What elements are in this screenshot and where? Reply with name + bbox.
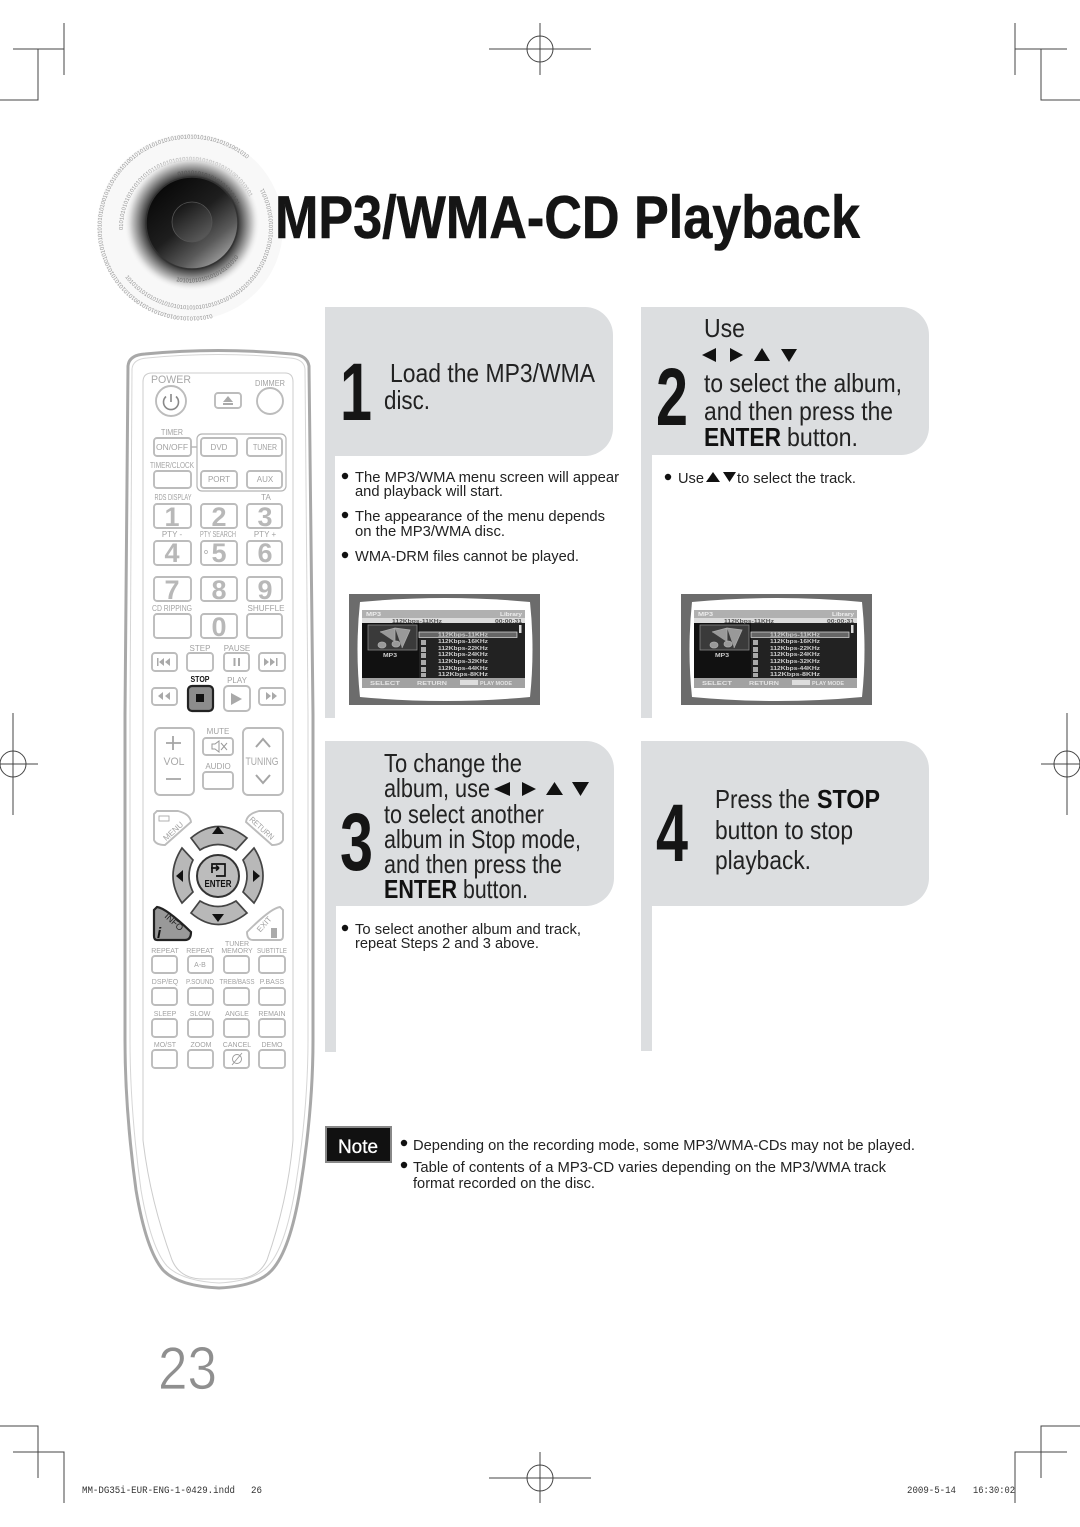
number keys: 3 [257,502,273,532]
navigation pad: ENTER [204,879,232,890]
step 1 bullet notes: and playback will start. [355,484,503,500]
top buttons: DVD [211,443,228,452]
step 1 bullet notes: WMA-DRM files cannot be played. [355,549,579,565]
lower function keys: MEMORY [221,948,253,955]
screen: MP3 menu, step 1: MP3 [383,653,397,659]
lower function keys: MO/ST [154,1042,177,1049]
number keys: 9 [257,575,273,605]
screen: MP3 menu, step 1: MP3 [366,612,381,618]
top buttons: TIMER/CLOCK [150,461,195,470]
panel: step 3: album in Stop mode, [384,824,581,854]
step 1 bullet notes: The appearance of the menu depends [355,509,605,525]
footer: file name: MM-DG35i-EUR-ENG-1-0429.indd [82,1485,235,1497]
step 2 bullet note: Use [678,471,704,487]
number keys: 6 [257,538,273,568]
transport keys: STEP [190,644,210,653]
number keys: 4 [164,538,180,568]
icon: direction arrows [494,782,589,796]
panel: step 2: ENTER [704,422,781,452]
footer: date and time: 16:30:02 [973,1485,1015,1497]
footer: date and time: 2009-5-14 [907,1485,956,1497]
panel: step 3: and then press the [384,849,562,879]
screen: MP3 menu, step 2: SELECT [702,681,733,687]
lower function keys: REPEAT [186,948,214,955]
panel: step 3 [325,741,614,1052]
screen: MP3 menu, step 1: 112Kbps-44KHz [438,666,488,672]
navigation pad: EXIT [255,915,274,934]
panel: step 4: STOP [817,784,880,814]
number keys: 1 [164,502,180,532]
panel: step 1: disc. [384,385,430,415]
panel: step 4 [641,741,929,1051]
number keys: 0 [211,612,227,642]
number keys: SHUFFLE [248,604,284,613]
icon: speaker with binary rings: 10101010101010101010101 [176,256,238,283]
panel: step 3: 3 [340,797,373,888]
lower function keys [151,941,287,1068]
lower function keys: CANCEL [223,1042,251,1049]
top buttons: ON/OFF [156,443,188,452]
screen: MP3 menu, step 2: 112Kbps-11KHz [724,619,774,625]
lower function keys: TUNER [225,941,249,948]
screen: MP3 menu, step 2: 112Kbps-32KHz [770,659,820,665]
note text [401,1138,915,1192]
panel: step 3: To change the [384,748,522,778]
transport keys: STOP [190,675,210,684]
number keys: 8 [211,575,227,605]
note badge [326,1127,391,1162]
screen: MP3 menu, step 1: 112Kbps-22KHz [438,646,488,652]
screen: MP3 menu, step 2: 112Kbps-11KHz [770,632,820,638]
screen: MP3 menu, step 2: Library [832,612,855,618]
page number: 23 [158,1335,217,1402]
number keys: TA [261,493,271,502]
navigation pad: i [157,925,162,942]
panel: step 1: 1 [340,347,372,438]
screen: MP3 menu, step 2: RETURN [749,681,779,687]
lower function keys: DSP/EQ [152,979,179,986]
panel: step 2: Use [704,313,745,343]
screen: MP3 menu, step 1: 112Kbps-16KHz [438,639,488,645]
screen: MP3 menu, step 1: SELECT [370,681,401,687]
icon: speaker with binary rings: 010101010101010101010101 [178,170,240,204]
lower function keys: TREB/BASS [220,979,255,986]
screen: MP3 menu, step 2: 112Kbps-24KHz [770,652,820,658]
navigation pad: INFO [163,911,185,933]
screen: MP3 menu, step 2: PLAY MODE [812,681,844,687]
icon: speaker with binary rings: 0101010101010101010101101010101010101010101010100101010101010101010101010101010101010 [119,156,252,230]
panel: step 2: 2 [656,352,688,443]
screen: MP3 menu, step 1: Library [500,612,523,618]
panel: step 1: Load the MP3/WMA [390,358,596,388]
step 1 bullet notes [342,470,619,565]
transport keys [152,644,285,711]
number keys: RDS DISPLAY [154,493,192,502]
note text: Depending on the recording mode, some MP3/WMA-CDs may not be played. [413,1138,915,1154]
screen: MP3 menu, step 1: 112Kbps-11KHz [392,619,442,625]
number keys: 7 [164,575,180,605]
transport keys: PAUSE [224,644,250,653]
screen: MP3 menu, step 2: 00:00:31 [827,619,854,625]
volume, mute and tuning keys: AUDIO [205,762,231,771]
icon: speaker with binary rings [98,134,273,321]
lower function keys: SUBTITLE [257,948,287,955]
panel: step 2 [641,307,929,718]
top buttons: AUX [257,475,274,484]
screen: MP3 menu, step 2: 112Kbps-22KHz [770,646,820,652]
navigation pad [154,811,283,942]
navigation pad: MENU [161,820,185,843]
step 3 bullet note: repeat Steps 2 and 3 above. [355,936,539,952]
navigation pad: RETURN [248,815,276,842]
footer: file name: 26 [251,1485,262,1497]
screen: MP3 menu, step 1: 00:00:31 [495,619,522,625]
title: MP3/WMA-CD Playback [275,184,861,251]
number keys: 2 [211,502,227,532]
lower function keys: REMAIN [258,1011,286,1018]
lower function keys: ZOOM [190,1042,212,1049]
top buttons: PORT [208,475,230,484]
lower function keys: P.BASS [260,979,285,986]
screen: MP3 menu, step 1: PLAY MODE [480,681,512,687]
volume, mute and tuning keys: TUNING [246,756,278,768]
number keys [152,493,284,642]
volume, mute and tuning keys [155,727,283,795]
top buttons: TIMER [161,428,183,437]
icon: speaker with binary rings: 0101010101001010101010100101010101010100101010101010101010010101010101010010101010101010100101010101010101001010101010101010010101010101010100101010101010101010101011 [98,134,249,321]
top buttons: TUNER [253,443,277,452]
panel: step 3: album, use [384,773,490,803]
panel: step 3: button. [463,874,528,904]
screen: MP3 menu, step 1: RETURN [417,681,447,687]
panel: step 4: button to stop [715,815,853,845]
panel: step 4: 4 [656,788,688,879]
lower function keys: REPEAT [151,948,179,955]
step 1 bullet notes: The MP3/WMA menu screen will appear [355,470,619,486]
screen: MP3 menu, step 2: 112Kbps-16KHz [770,639,820,645]
top buttons: DIMMER [255,379,285,388]
number keys: PTY + [254,530,276,539]
panel: step 2: to select the album, [704,368,902,398]
screen: MP3 menu, step 1: 112Kbps-24KHz [438,652,488,658]
panel: step 2: and then press the [704,396,893,426]
screen: MP3 menu, step 1: 112Kbps-32KHz [438,659,488,665]
panel: step 4: Press the [715,784,810,814]
number keys: 5 [211,538,227,568]
screen: MP3 menu, step 1 [349,594,540,705]
remote control [125,350,313,1288]
panel: step 2: button. [787,422,858,452]
icon: speaker with binary rings: 1010101010101010101010101010101010101010101010101010101010101010101010101011 [125,188,273,310]
screen: MP3 menu, step 2: MP3 [698,612,713,618]
transport keys: PLAY [227,676,248,685]
step 3 bullet note [342,922,581,952]
screen: MP3 menu, step 2: MP3 [715,653,729,659]
lower function keys: A-B [194,962,206,969]
screen: MP3 menu, step 2: 112Kbps-44KHz [770,666,820,672]
volume, mute and tuning keys: VOL [164,756,184,768]
screen: MP3 menu, step 1: 112Kbps-11KHz [438,632,488,638]
number keys: PTY - [162,530,182,539]
lower function keys: SLEEP [154,1011,177,1018]
top buttons: POWER [151,374,191,386]
screen: MP3 menu, step 1: 112Kbps-8KHz [438,672,488,678]
number keys: PTY SEARCH [200,530,236,539]
footer: date and time [907,1485,1015,1497]
icon: direction arrows [702,348,797,362]
screen: MP3 menu, step 2: 112Kbps-8KHz [770,672,820,678]
note badge: Note [338,1137,378,1158]
lower function keys: SLOW [190,1011,211,1018]
remote body [125,350,313,1288]
lower function keys: ANGLE [225,1011,249,1018]
note text: Table of contents of a MP3-CD varies depending on the MP3/WMA track [413,1160,887,1176]
lower function keys: DEMO [262,1042,283,1049]
panel: step 1 [325,307,619,718]
screen: MP3 menu, step 2 [681,594,872,705]
top buttons [150,374,286,491]
step 2 bullet note [665,471,856,487]
panel: step 4: playback. [715,845,811,875]
volume, mute and tuning keys: MUTE [207,727,229,736]
step 2 bullet note: to select the track. [737,471,856,487]
panel: step 3: to select another [384,799,544,829]
lower function keys: P.SOUND [186,979,214,986]
step 3 bullet note: To select another album and track, [355,922,581,938]
step 1 bullet notes: on the MP3/WMA disc. [355,524,505,540]
number keys: CD RIPPING [152,604,192,613]
panel: step 3: ENTER [384,874,457,904]
note text: format recorded on the disc. [413,1176,595,1192]
